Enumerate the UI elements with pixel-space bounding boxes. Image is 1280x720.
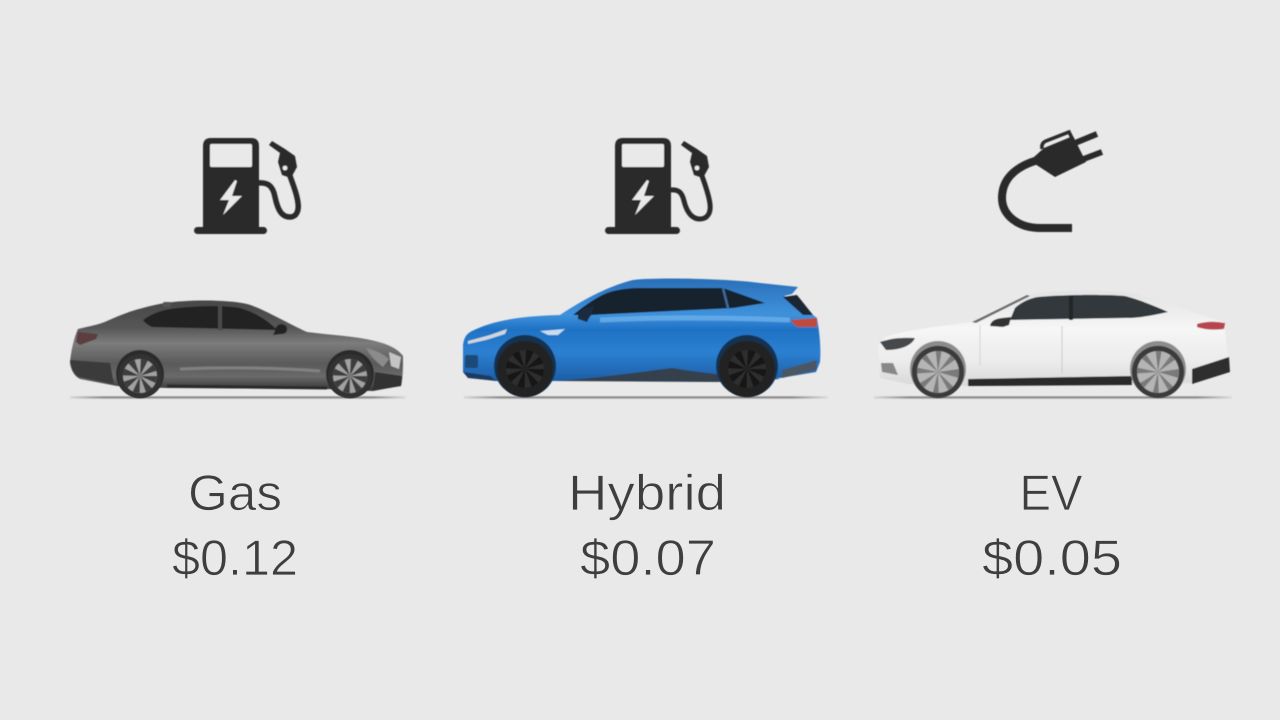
ground shadow xyxy=(464,396,828,398)
wheels xyxy=(912,346,1184,398)
wheels xyxy=(118,354,372,398)
car: white EV sedan xyxy=(874,291,1232,398)
icon: fuel pump (hybrid) xyxy=(605,138,710,234)
panel: gas xyxy=(70,138,406,586)
label: Hybrid: Hybrid xyxy=(568,465,726,521)
panel: EV xyxy=(874,132,1232,586)
car: grey sedan xyxy=(70,300,406,398)
ground shadow xyxy=(70,396,406,398)
label: Gas: Gas xyxy=(188,465,282,521)
icon: electric plug xyxy=(1002,132,1102,228)
value: $0.07: $0.07 xyxy=(580,530,716,586)
wheels xyxy=(497,341,775,397)
panel: hybrid xyxy=(463,138,828,586)
value: $0.05: $0.05 xyxy=(982,530,1122,586)
value: $0.12: $0.12 xyxy=(172,530,298,586)
label: EV: EV xyxy=(1020,465,1083,521)
ground shadow xyxy=(874,396,1232,398)
car: blue hybrid crossover xyxy=(463,279,828,398)
icon: fuel pump (gas) xyxy=(194,138,298,234)
